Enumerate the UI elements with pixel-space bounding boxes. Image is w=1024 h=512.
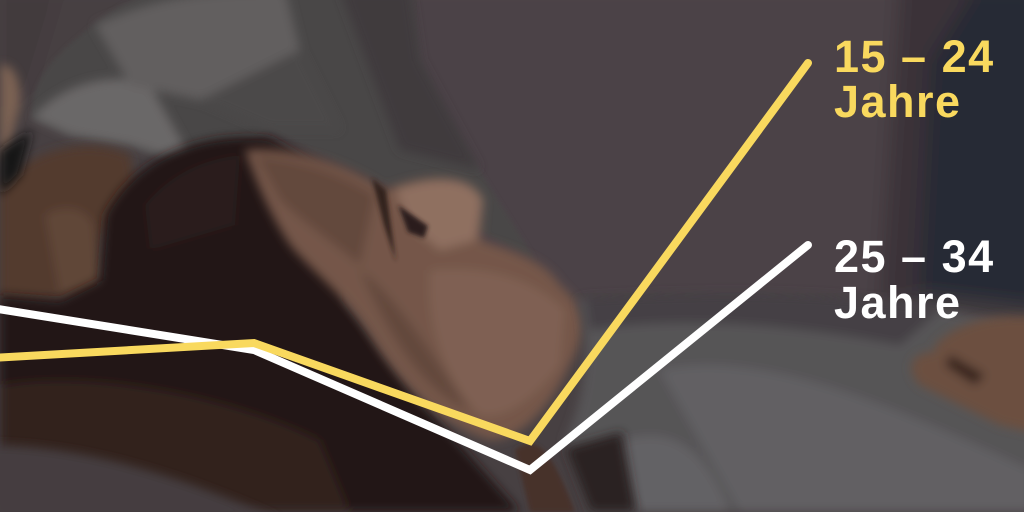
- label: 15 – 24 Jahre: 15 – 24: [834, 31, 995, 82]
- line: 15 – 24 Jahre: [0, 63, 808, 441]
- face: [245, 149, 582, 440]
- neck: [515, 444, 575, 512]
- eye and brow: [372, 178, 428, 262]
- watch strap at left edge: [0, 130, 32, 195]
- hair: [0, 137, 520, 512]
- pillow under hair: [0, 445, 280, 512]
- hand on the right: [912, 316, 1024, 435]
- grey shirt: [565, 294, 1024, 512]
- label: 25 – 34 Jahre: 25 – 34: [834, 231, 995, 282]
- line chart: [0, 63, 808, 470]
- sleeve of raised arm: [32, 0, 535, 260]
- shirt collar shadow: [565, 432, 636, 512]
- label: 15 – 24 Jahre: Jahre: [834, 76, 962, 127]
- label: 25 – 34 Jahre: Jahre: [834, 277, 962, 328]
- line: 25 – 34 Jahre: [0, 245, 808, 470]
- hand in hair: [0, 65, 135, 300]
